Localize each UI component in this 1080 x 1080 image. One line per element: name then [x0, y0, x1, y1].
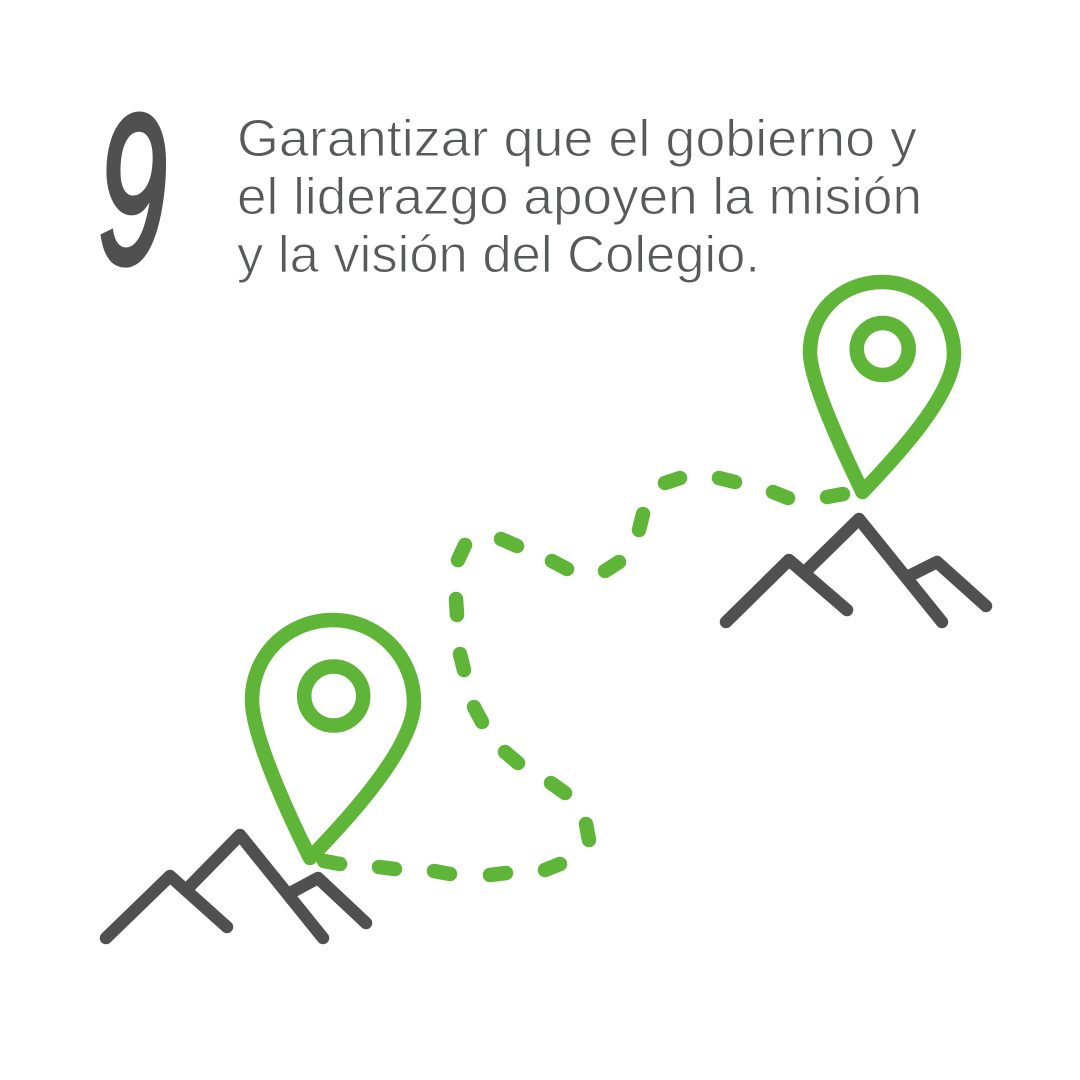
heading text: y la visión del Colegio.	[237, 226, 760, 284]
heading text: Garantizar que el gobierno y	[237, 110, 917, 168]
number 9: 9	[98, 71, 167, 309]
icon: destination pin	[810, 282, 954, 492]
heading text	[237, 110, 922, 284]
icon: destination mountains	[726, 519, 986, 622]
icon: origin mountains	[106, 835, 366, 938]
heading text: el liderazgo apoyen la misión	[237, 168, 922, 226]
dashed route	[324, 478, 843, 875]
icon: origin pin	[252, 620, 414, 858]
